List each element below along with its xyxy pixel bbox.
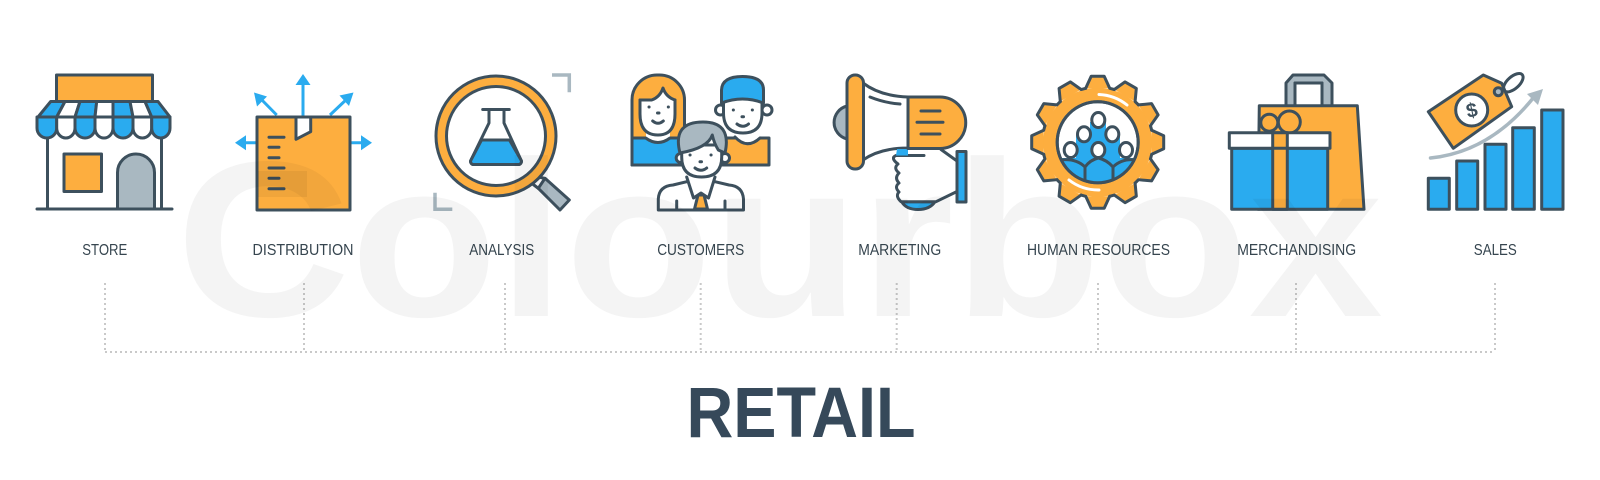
cone: [863, 83, 908, 160]
body: [908, 97, 966, 148]
cap man face: [733, 110, 752, 126]
hand: [893, 148, 957, 202]
price tag: [1428, 75, 1512, 148]
front man head: [676, 122, 730, 177]
woman: [632, 75, 685, 165]
icon: store: [37, 75, 172, 209]
gear highlights: [1069, 94, 1127, 190]
cuff: [957, 152, 966, 202]
lens: [436, 76, 556, 196]
store sign: [56, 75, 152, 102]
arm marks: [677, 201, 725, 209]
front man face: [690, 155, 711, 170]
icon: customers: [632, 75, 772, 210]
hand bottom: [902, 202, 935, 210]
label: sales: SALES: [1474, 242, 1517, 259]
bag handle: [1286, 75, 1332, 106]
rim: [847, 75, 864, 169]
man with cap: [716, 76, 772, 165]
gear centre: [1057, 102, 1138, 183]
outgoing arrows: [235, 74, 372, 150]
handle top: [896, 149, 908, 156]
icon: merchandising bag and gift: [1229, 75, 1364, 209]
label: merchandising: MERCHANDISING: [1237, 242, 1356, 259]
icon: marketing megaphone: [834, 75, 966, 210]
icon: human resources gear: [1032, 76, 1164, 208]
box: [257, 117, 350, 210]
flask liquid: [471, 140, 521, 165]
handle: [530, 176, 545, 188]
focus corners: [435, 75, 569, 209]
title: RETAIL: [686, 374, 916, 453]
store door: [118, 154, 154, 209]
label: store: STORE: [82, 242, 127, 259]
icon: sales chart: [1428, 70, 1563, 209]
box ruler ticks: [269, 137, 284, 189]
people group: [1062, 111, 1134, 182]
icon: distribution box: [235, 74, 372, 210]
growth arrow: [1430, 97, 1534, 158]
store walls: [48, 135, 162, 209]
gift box: [1232, 148, 1328, 209]
centre ring: [1057, 102, 1138, 183]
gear body: [1032, 76, 1164, 208]
front man body: [658, 182, 744, 210]
shopping bag: [1258, 106, 1364, 209]
label: customers: CUSTOMERS: [657, 242, 744, 259]
flask: [471, 110, 521, 165]
label: analysis: ANALYSIS: [469, 242, 534, 259]
label: distribution: DISTRIBUTION: [252, 242, 354, 259]
woman face: [649, 107, 668, 123]
store window: [64, 154, 102, 192]
gift bow: [1261, 114, 1278, 131]
label: human resources: HUMAN RESOURCES: [1027, 242, 1170, 259]
icon: analysis magnifier: [435, 75, 569, 210]
speaker back: [834, 106, 847, 139]
striped awning: [37, 102, 170, 138]
gift lid: [1229, 133, 1330, 148]
dollar badge: $: [1464, 99, 1480, 123]
infographic canvas: [36, 72, 1564, 438]
watermark: Colourbox: [176, 116, 1383, 364]
ground line: [37, 208, 172, 210]
box tab: [296, 117, 311, 139]
ribbon: [1273, 133, 1287, 209]
collar: [687, 177, 715, 198]
label: marketing: MARKETING: [858, 242, 941, 259]
bars: [1428, 110, 1563, 209]
price tag loop: [1500, 70, 1526, 95]
dotted connector bracket: [105, 283, 1495, 352]
tie: [694, 195, 708, 209]
